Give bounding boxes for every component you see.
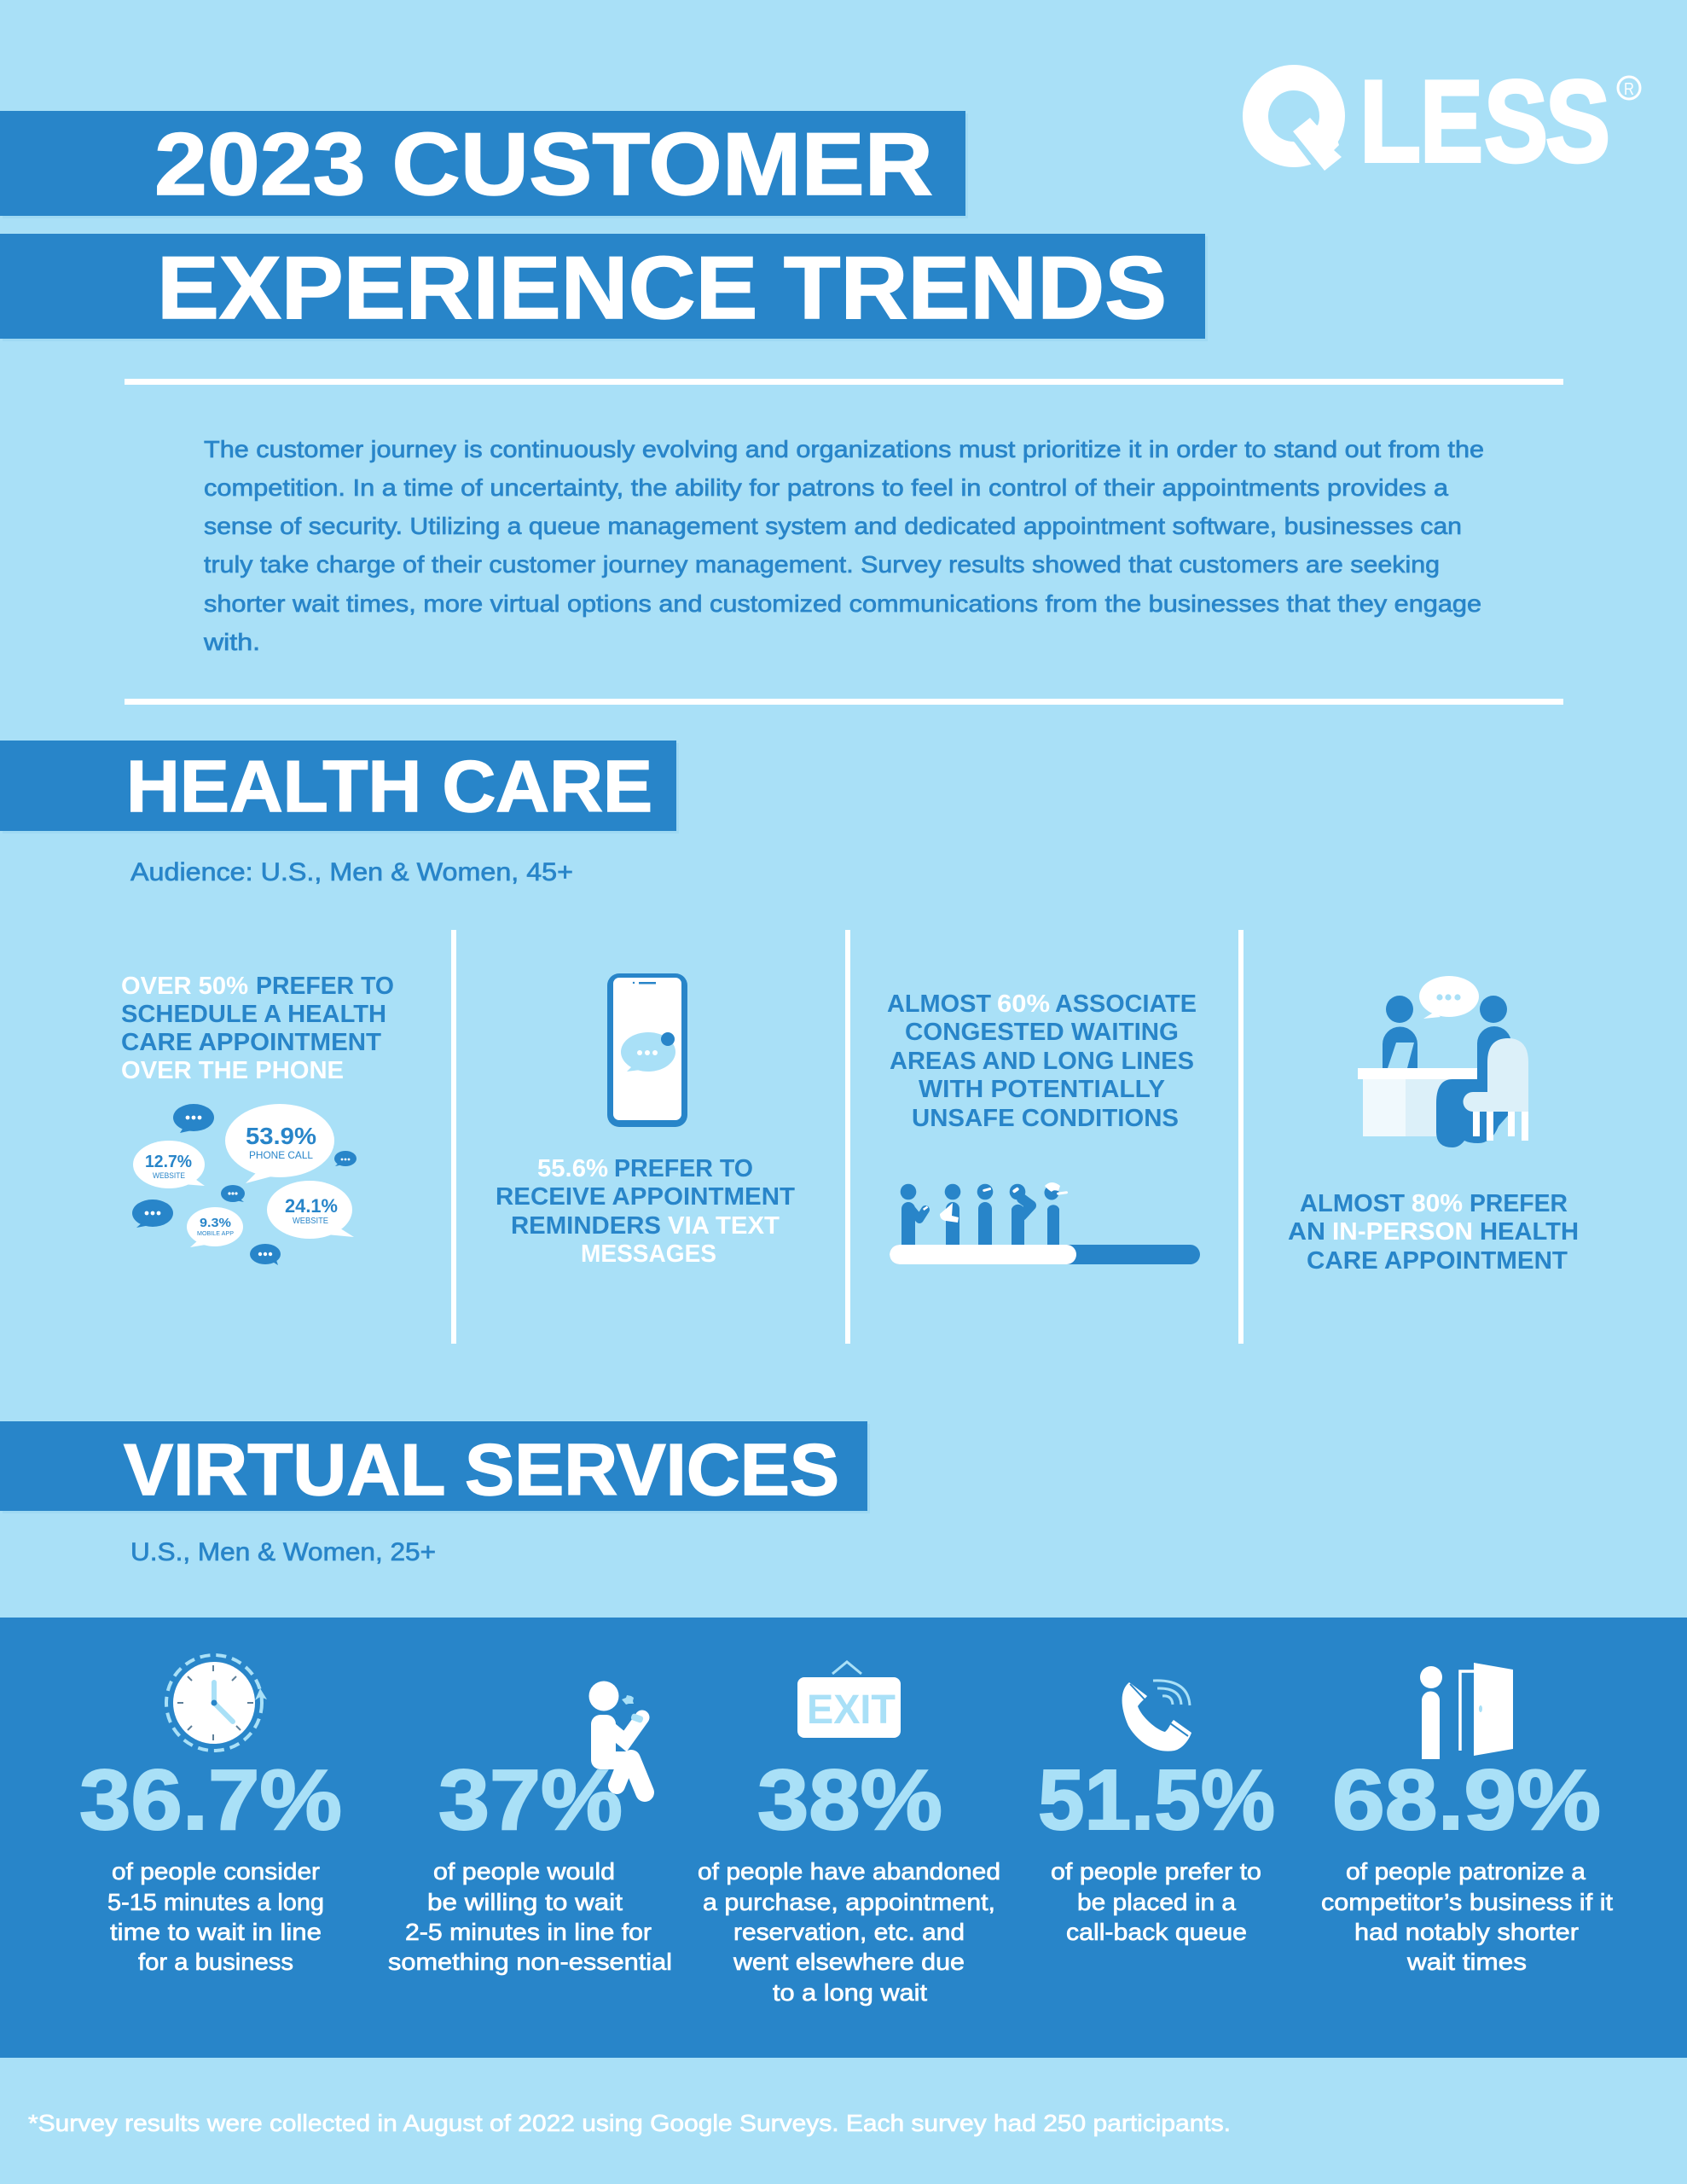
label: 9.3% mobile app bbox=[197, 1216, 234, 1237]
label: 12.7% website: 12.7% bbox=[145, 1153, 192, 1171]
stat: 68.9%: 68.9% bbox=[1332, 1752, 1601, 1848]
text: 55.6% prefer reminders: MESSAGES bbox=[581, 1240, 716, 1268]
icon: clock bbox=[166, 1655, 267, 1751]
heading: over 50%: PREFER TO bbox=[256, 973, 394, 1000]
heading: virtual services: VIRTUAL SERVICES bbox=[124, 1430, 839, 1511]
intro paragraph: competition. In a time of uncertainty, the ability for patrons to feel in control of their appointments provides a bbox=[204, 474, 1448, 501]
text: 36.7% description: time to wait in line bbox=[110, 1919, 322, 1945]
logo: QLESS: S bbox=[1545, 56, 1610, 186]
label: 9.3% mobile app: MOBILE APP bbox=[197, 1231, 234, 1237]
text: 38% description: of people have abandoned bbox=[698, 1858, 1000, 1885]
stat: 37%: 37% bbox=[438, 1752, 623, 1848]
label: 12.7% website bbox=[145, 1153, 192, 1180]
heading: over 50%: CARE APPOINTMENT bbox=[121, 1029, 381, 1056]
text: almost 60%: CONGESTED WAITING bbox=[905, 1019, 1179, 1046]
text: 37% description: of people would bbox=[433, 1858, 615, 1885]
label: 53.9% phone call: PHONE CALL bbox=[249, 1149, 313, 1161]
text: almost 60%: WITH POTENTIALLY bbox=[919, 1076, 1165, 1103]
text: 51.5% description: of people prefer to bbox=[1051, 1858, 1261, 1885]
text: 51.5% description: call-back queue bbox=[1066, 1919, 1247, 1945]
icon: seated person waiting bbox=[588, 1681, 645, 1792]
heading: health care bbox=[0, 741, 679, 834]
heading: over 50%: OVER 50% bbox=[121, 973, 248, 1000]
text: 55.6% prefer reminders: PREFER TO bbox=[614, 1155, 753, 1182]
label: 12.7% website: WEBSITE bbox=[153, 1171, 185, 1180]
icon: smartphone bbox=[607, 973, 687, 1127]
text: 38% description: went elsewhere due bbox=[733, 1949, 965, 1975]
icon: queue of people with progress bar bbox=[890, 1182, 1200, 1264]
heading: over 50% bbox=[121, 973, 394, 1084]
stat: 36.7%: 36.7% bbox=[79, 1752, 342, 1848]
text: 37% description: something non-essential bbox=[388, 1949, 672, 1975]
text: 55.6% prefer reminders: VIA TEXT bbox=[668, 1212, 780, 1240]
text: 37% description: 2-5 minutes in line for bbox=[405, 1919, 652, 1945]
panel: virtual services statistics band bbox=[0, 1618, 1687, 2058]
icon: exit sign: EXIT bbox=[807, 1687, 896, 1733]
text: 55.6% prefer reminders: REMINDERS bbox=[511, 1212, 661, 1240]
intro paragraph: sense of security. Utilizing a queue management system and dedicated appointment software, businesses can bbox=[204, 513, 1462, 539]
text: 68.9% description: wait times bbox=[1406, 1949, 1527, 1975]
text: 37% description bbox=[388, 1858, 672, 1975]
intro paragraph: The customer journey is continuously evolving and organizations must prioritize it in order to stand out from the bbox=[204, 436, 1484, 462]
title: EXPERIENCE TRENDS bbox=[157, 239, 1167, 338]
text: 36.7% description: 5-15 minutes a long bbox=[107, 1889, 324, 1915]
text: 38% description: to a long wait bbox=[773, 1979, 927, 2006]
intro paragraph: shorter wait times, more virtual options and customized communications from the businesses that they engage bbox=[204, 590, 1481, 617]
text: almost 60%: 60% bbox=[997, 990, 1050, 1018]
heading: over 50%: OVER THE PHONE bbox=[121, 1057, 344, 1084]
panel: congested waiting areas bbox=[887, 990, 1200, 1264]
stat: 51.5% bbox=[1038, 1681, 1275, 1945]
text: almost 80%: HEALTH bbox=[1480, 1218, 1579, 1246]
logo: QLESS: L bbox=[1359, 56, 1421, 186]
stat: 68.9% bbox=[1321, 1663, 1613, 1975]
text: 68.9% description: of people patronize a bbox=[1346, 1858, 1586, 1885]
icon: exit sign bbox=[797, 1662, 901, 1738]
text: 51.5% description bbox=[1051, 1858, 1261, 1945]
text: 51.5% description: be placed in a bbox=[1077, 1889, 1236, 1915]
text: almost 80%: CARE APPOINTMENT bbox=[1307, 1247, 1568, 1275]
text: 36.7% description bbox=[107, 1858, 324, 1975]
stat: 38%: 38% bbox=[757, 1752, 942, 1848]
intro paragraph bbox=[203, 436, 1484, 655]
text: 55.6% prefer reminders: 55.6% bbox=[537, 1155, 608, 1182]
audience: virtual services: U.S., Men & Women, 25+ bbox=[130, 1538, 436, 1566]
stat: 37% bbox=[388, 1681, 672, 1975]
icon: patient at reception desk bbox=[1358, 976, 1528, 1147]
title: 2023 CUSTOMER bbox=[154, 115, 933, 214]
logo: QLESS: S bbox=[1484, 56, 1548, 186]
text: almost 80%: IN-PERSON bbox=[1332, 1218, 1473, 1246]
text: almost 80%: 80% bbox=[1412, 1190, 1463, 1217]
label: 9.3% mobile app: 9.3% bbox=[200, 1216, 231, 1230]
text: 55.6% prefer reminders bbox=[496, 1155, 795, 1268]
label: 24.1% website: WEBSITE bbox=[293, 1217, 328, 1226]
chart: speech bubbles bbox=[132, 1104, 357, 1265]
title bbox=[0, 111, 1208, 341]
text: almost 80%: AN bbox=[1288, 1218, 1325, 1246]
intro paragraph: with. bbox=[203, 629, 260, 655]
logo: QLESS: E bbox=[1420, 56, 1483, 186]
text: 68.9% description bbox=[1321, 1858, 1613, 1975]
text: 37% description: be willing to wait bbox=[427, 1889, 623, 1915]
text: almost 60%: ASSOCIATE bbox=[1055, 990, 1197, 1018]
text: almost 60%: ALMOST bbox=[887, 990, 991, 1018]
text: 38% description: a purchase, appointment, bbox=[703, 1889, 995, 1915]
heading: over 50%: SCHEDULE A HEALTH bbox=[121, 1001, 386, 1028]
logo: QLESS bbox=[1255, 56, 1640, 186]
heading: health care: HEALTH CARE bbox=[126, 746, 652, 828]
text: 68.9% description: competitor’s business if it bbox=[1321, 1889, 1613, 1915]
text: almost 80% bbox=[1288, 1190, 1579, 1275]
audience: health care: Audience: U.S., Men & Women, 45+ bbox=[130, 858, 573, 886]
text: almost 80%: ALMOST bbox=[1300, 1190, 1405, 1217]
text: almost 80%: PREFER bbox=[1470, 1190, 1568, 1217]
icon: person and door bbox=[1420, 1663, 1513, 1759]
panel: in-person appointment bbox=[1288, 976, 1579, 1275]
text: 36.7% description: for a business bbox=[138, 1949, 293, 1975]
text: 36.7% description: of people consider bbox=[112, 1858, 320, 1885]
text: 68.9% description: had notably shorter bbox=[1354, 1919, 1579, 1945]
text: almost 60% bbox=[887, 990, 1197, 1132]
label: 24.1% website: 24.1% bbox=[285, 1195, 338, 1217]
text: 55.6% prefer reminders: RECEIVE APPOINTMENT bbox=[496, 1183, 795, 1211]
intro paragraph: truly take charge of their customer journey management. Survey results showed that customers are seeking bbox=[204, 551, 1440, 578]
label: 24.1% website bbox=[285, 1195, 338, 1226]
footnote: *Survey results were collected in August of 2022 using Google Surveys. Each survey had 250 participants. bbox=[28, 2110, 1231, 2136]
text: 38% description bbox=[698, 1858, 1000, 2006]
icon: telephone with signal bbox=[1122, 1681, 1191, 1751]
label: 53.9% phone call: 53.9% bbox=[246, 1123, 316, 1149]
panel: text reminders bbox=[496, 973, 795, 1268]
stat: 38% bbox=[698, 1662, 1000, 2006]
panel: schedule by phone bbox=[121, 973, 394, 1265]
stat: 36.7% bbox=[79, 1655, 342, 1975]
label: 53.9% phone call bbox=[246, 1123, 316, 1161]
logo: QLESS: R bbox=[1624, 80, 1634, 99]
text: 38% description: reservation, etc. and bbox=[733, 1919, 965, 1945]
text: almost 60%: UNSAFE CONDITIONS bbox=[912, 1105, 1179, 1132]
stat: 51.5%: 51.5% bbox=[1038, 1752, 1275, 1848]
text: almost 60%: AREAS AND LONG LINES bbox=[890, 1048, 1194, 1075]
